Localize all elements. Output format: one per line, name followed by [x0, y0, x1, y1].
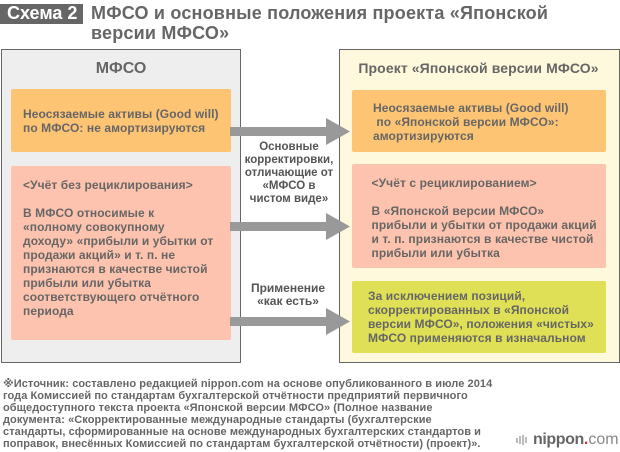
arrow: as is [230, 308, 350, 335]
text: without recycling: <Учёт без рециклирования> В МФСО относимые к «полному совокупному доходу» «прибыли и убытки от продажи акций» и т. п. не признаются в качестве чистой прибыли или убытка соответствующего отчётного периода [23, 178, 213, 318]
box: applied as is [352, 281, 606, 353]
badge: scheme number: Схема 2 [7, 3, 77, 23]
box: with recycling [352, 164, 606, 268]
title: МФСО и основные положения проекта «Японской версии МФСО» [91, 3, 548, 43]
arrow: recycling [230, 213, 350, 240]
box: intangibles under IFRS [11, 89, 231, 152]
panel: IFRS [1, 49, 241, 363]
box: without recycling [11, 166, 231, 340]
panel heading: Japanese IFRS: Проект «Японской версии МФСО» [358, 60, 599, 76]
text: applied as is: За исключением позиций, скорректированных в «Японской версии МФСО», положения «чистых» МФСО применяются в изначальном [368, 289, 594, 345]
text: intangibles under IFRS: Неосязаемые активы (Good will) по МФСО: не амортизируются [23, 107, 219, 135]
logo: nippon.com: nippon.com [533, 431, 619, 448]
label: applied as is: Применение «как есть» [251, 281, 325, 308]
text: intangibles under Japanese IFRS: Неосязаемые активы (Good will) по «Японской версии МФСО»: амортизируются [373, 101, 569, 143]
box: intangibles under Japanese IFRS [352, 90, 606, 152]
label: main adjustments: Основные корректировки, отличающие от «МФСО в чистом виде» [245, 141, 333, 205]
panel: Japanese IFRS [339, 49, 620, 363]
arrow: intangibles [230, 118, 350, 145]
footnote: ※Источник: составлено редакцией nippon.com на основе опубликованного в июле 2014 года Комиссией по стандартам бухгалтерской отчётности предприятий первичного общедоступного текста проекта «Японской версии МФСО» (Полное название документа: «Скорректированные международные стандарты (бухгалтерские стандарты, сформированные на основе международных бухгалтерских стандартов и поправок, внесённых Комиссией по стандартам бухгалтерской отчётности) (проект)». [3, 378, 492, 450]
text: with recycling: <Учёт с рециклированием> В «Японской версии МФСО» прибыли и убытки от продажи акций и т. п. признаются в качестве чистой прибыли или убытка [372, 176, 597, 260]
panel heading: IFRS: МФСО [96, 60, 146, 77]
